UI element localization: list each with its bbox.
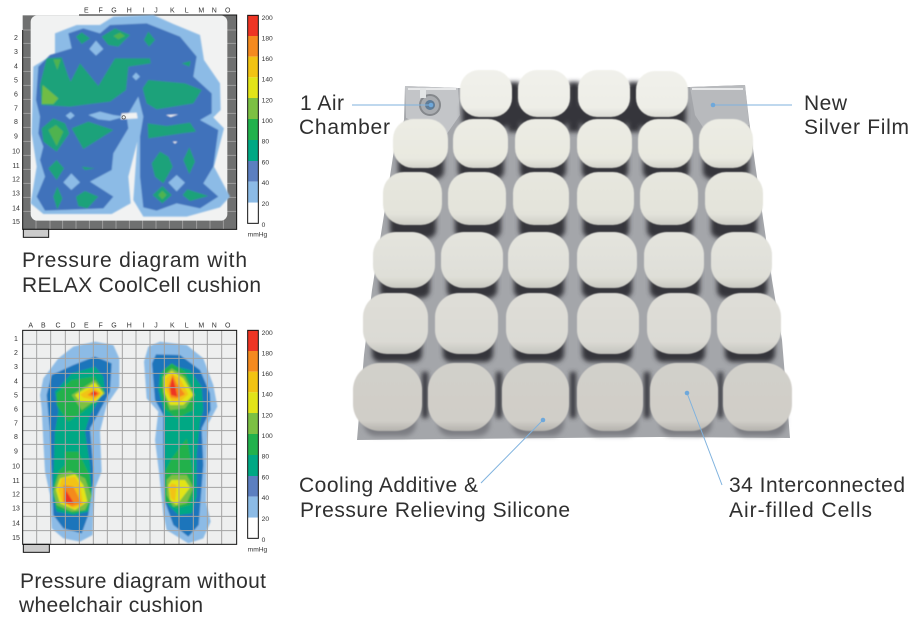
pressure scale legend: 20 (262, 516, 269, 523)
column letters: F (99, 8, 103, 15)
column letters: E (84, 8, 89, 15)
column letters: I (143, 323, 145, 330)
callout: New Silver Film: Silver Film (804, 116, 909, 139)
callout: 1 Air Chamber: Chamber (299, 116, 390, 139)
pressure scale legend: 80 (262, 453, 269, 460)
row numbers: 15 (12, 535, 20, 542)
column letters: A (28, 323, 33, 330)
pressure scale legend: 120 (262, 413, 273, 420)
row numbers: 3 (14, 49, 18, 56)
grid lines (23, 330, 237, 544)
row numbers: 12 (12, 492, 20, 499)
row 6 cells (353, 363, 792, 431)
row numbers: 5 (14, 77, 18, 84)
row numbers: 10 (12, 148, 20, 155)
row numbers: 11 (12, 163, 20, 170)
column letters: K (170, 8, 175, 15)
pressure scale legend: 200 (262, 330, 273, 337)
callout: 1 Air Chamber: 1 Air (300, 92, 344, 115)
column letters: O (225, 323, 231, 330)
row 3 cells (383, 172, 763, 225)
column letters: N (212, 8, 217, 15)
row numbers: 3 (14, 364, 18, 371)
column letters: B (41, 323, 46, 330)
row numbers: 15 (12, 219, 20, 226)
callout: 34 Interconnected Air-filled Cells (685, 391, 905, 522)
row 5 cells (363, 293, 781, 354)
caption: without cushion: wheelchair cushion (18, 594, 203, 617)
pressure scale legend: 140 (262, 392, 273, 399)
caption: with cushion: RELAX CoolCell cushion (22, 274, 261, 297)
row numbers: 13 (12, 506, 20, 513)
column letters: I (143, 8, 145, 15)
pressure scale legend: 60 (262, 475, 269, 482)
column letters: H (127, 323, 132, 330)
pressure scale legend: 180 (262, 350, 273, 357)
column letters: F (99, 323, 103, 330)
row numbers: 4 (14, 378, 18, 385)
pressure scale legend (248, 15, 273, 238)
callout: 34 Interconnected Air-filled Cells: 34 Interconnected (729, 474, 905, 497)
column letters: M (198, 323, 204, 330)
callout: New Silver Film (711, 92, 909, 139)
left foot heat map (40, 342, 119, 542)
pressure scale legend: 20 (262, 201, 269, 208)
column letters: H (127, 8, 132, 15)
caption: with cushion: Pressure diagram with (22, 249, 247, 272)
pressure scale legend: 160 (262, 371, 273, 378)
pressure scale legend: 80 (262, 138, 269, 145)
callout: 34 Interconnected Air-filled Cells: Air-filled Cells (729, 499, 872, 522)
callout: Cooling Additive and Pressure Relieving Silicone: Pressure Relieving Silicone (300, 499, 570, 522)
pressure scale legend: 40 (262, 495, 269, 502)
pressure scale legend: 140 (262, 77, 273, 84)
row numbers: 10 (12, 463, 20, 470)
column letters: L (185, 8, 189, 15)
callout: Cooling Additive and Pressure Relieving Silicone (299, 418, 570, 522)
sensor grid (23, 330, 237, 552)
pressure scale legend: mmHg (248, 546, 268, 553)
column letters: N (212, 323, 217, 330)
callout: 1 Air Chamber (299, 92, 433, 139)
cell shadows (364, 82, 786, 436)
column letters: M (198, 8, 204, 15)
row 2 cells (393, 119, 753, 168)
column letters: K (170, 323, 175, 330)
row numbers: 2 (14, 35, 18, 42)
column letters: D (70, 323, 76, 330)
row numbers: 12 (12, 177, 20, 184)
heat map contours (31, 15, 230, 217)
column letters (84, 8, 231, 15)
row 4 cells (373, 232, 772, 288)
row numbers: 14 (12, 206, 20, 213)
right foot heat map (144, 342, 217, 543)
row numbers: 11 (12, 478, 20, 485)
row numbers: 9 (14, 448, 18, 455)
column letters: C (55, 323, 61, 330)
row numbers: 6 (14, 91, 18, 98)
row numbers: 2 (14, 350, 18, 357)
row numbers: 13 (12, 191, 20, 198)
column letters: E (84, 323, 89, 330)
column letters: J (154, 8, 158, 15)
column letters: G (111, 323, 117, 330)
pressure scale legend: 160 (262, 56, 273, 63)
pressure diagram: without cushion (12, 323, 273, 553)
pressure scale legend: 100 (262, 433, 273, 440)
pressure scale legend: 40 (262, 180, 269, 187)
column letters: J (154, 323, 158, 330)
sensor frame (23, 15, 237, 237)
row numbers: 6 (14, 406, 18, 413)
callout: New Silver Film: New (804, 92, 848, 115)
row numbers (12, 336, 20, 542)
row numbers: 8 (14, 119, 18, 126)
column letters (28, 323, 231, 330)
pressure scale legend: 0 (262, 537, 266, 544)
silver film base (357, 85, 790, 440)
pressure scale legend: 100 (262, 118, 273, 125)
row numbers: 7 (14, 421, 18, 428)
pressure scale legend: 0 (262, 222, 266, 229)
column letters: G (111, 8, 117, 15)
column letters: O (225, 8, 231, 15)
column letters: L (185, 323, 189, 330)
row numbers: 1 (14, 336, 18, 343)
row numbers: 8 (14, 434, 18, 441)
pressure diagram: with RELAX CoolCell cushion (12, 8, 273, 238)
pressure scale legend: 60 (262, 160, 269, 167)
sensor marker (122, 116, 125, 119)
pressure scale legend: 180 (262, 35, 273, 42)
cushion illustration (353, 70, 792, 440)
row 1 cells (460, 70, 688, 117)
row numbers: 7 (14, 106, 18, 113)
callout: Cooling Additive and Pressure Relieving Silicone: Cooling Additive & (299, 474, 478, 497)
row numbers: 5 (14, 392, 18, 399)
row numbers (12, 35, 20, 226)
pressure scale legend: 200 (262, 15, 273, 22)
row numbers: 14 (12, 521, 20, 528)
pressure scale legend: 120 (262, 98, 273, 105)
pressure scale legend (248, 330, 273, 553)
row numbers: 4 (14, 63, 18, 70)
row numbers: 9 (14, 133, 18, 140)
pressure scale legend: mmHg (248, 231, 268, 238)
caption: without cushion: Pressure diagram without (20, 570, 266, 593)
